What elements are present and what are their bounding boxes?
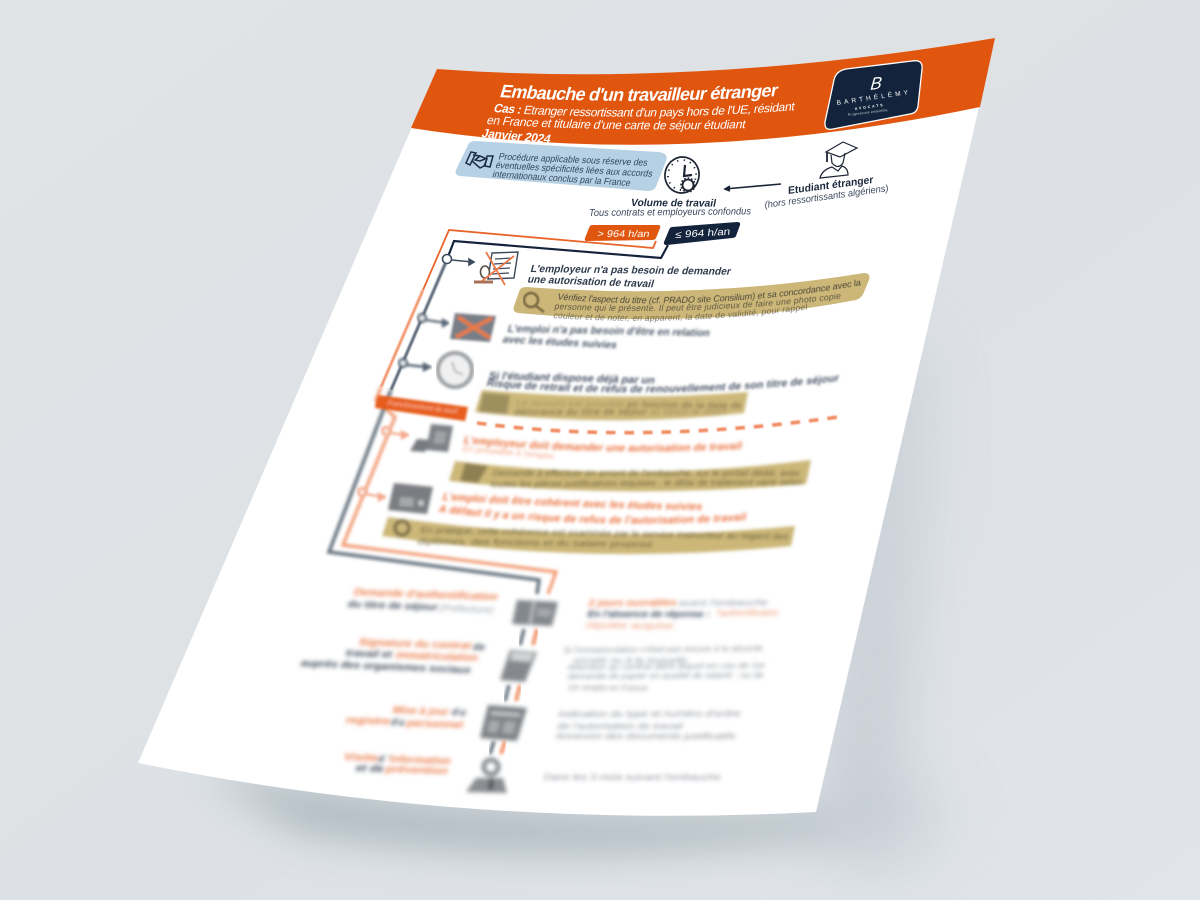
step 2 label: immatriculation: [394, 650, 479, 664]
step 4 label: d': [376, 754, 392, 765]
note text: Demande à effectuer en amont de l'embauche, sur le portail dédié, avec: [492, 468, 802, 478]
step 2 detail: 1er emploi en France: [566, 682, 649, 693]
step 3 label: Mise à jour: [391, 705, 451, 718]
notice text: Procédure applicable sous réserve des: [497, 152, 649, 169]
step 2: contract signature: [299, 637, 767, 693]
node and arrow: [358, 488, 385, 500]
note text: [417, 525, 790, 549]
step 4: medical visit: [342, 752, 722, 793]
tag: more than 964: [585, 225, 660, 241]
date: Janvier 2024: [482, 129, 551, 142]
row 4: authorisation required: [380, 422, 744, 461]
tag: less than 964: ≤ 964 h/an: [675, 227, 731, 241]
note text: [490, 468, 804, 489]
note text: couleur et de noter, en apparent, la date de validité, pour rappel: [554, 303, 808, 323]
step 3 detail: Annexion des documents justificatifs: [555, 731, 737, 741]
panel: gold note 3: [449, 460, 811, 491]
notice text: éventuelles spécificités liées aux accords: [494, 160, 654, 180]
logo: BARTHÉLÉMY: [836, 87, 909, 107]
step 2 detail: Attention au contrat dans lequel en cas de 1er: [567, 660, 767, 672]
step 4 label: prévention: [384, 764, 449, 777]
note text: diplômes, des fonctions et du salaire proposé: [417, 536, 654, 549]
step 2 label: auprès des organismes sociaux: [299, 658, 473, 676]
logo: Progressons ensemble: [848, 108, 888, 117]
panel: gold note 1: [514, 273, 870, 323]
volume label: Volume de travail: [631, 197, 717, 210]
row 5 text: A défaut il y a un risque de refus de l'autorisation de travail: [436, 503, 748, 526]
dashed threshold line: [477, 417, 838, 433]
icon: note: [460, 463, 488, 483]
step 3 detail: [555, 708, 742, 741]
step 3 label: [344, 705, 468, 731]
step 2 detail: [563, 643, 767, 693]
note text: En pratique, cette cohérence est examinée par le service instructeur au regard des: [420, 525, 790, 541]
note text: Vérifiez l'aspect du titre (cf. PRADO site Consilium) et sa concordance avec la: [558, 280, 861, 306]
step 1 detail: avant l'embauche: [678, 597, 769, 608]
icon: graduate student: [820, 142, 857, 178]
step 1: authentication: [346, 587, 780, 631]
step 2 label: travail et: [344, 648, 394, 661]
dashed connector 1: [520, 629, 537, 645]
subtitle line 2: en France et titulaire d'une carte de séjour étudiant: [487, 116, 746, 132]
step 2 detail: demande de papier en qualité de salarié - ou de: [567, 670, 765, 681]
row 4 text: L'employeur doit demander une autorisation de travail: [462, 434, 744, 454]
logo: AVOCATS: [855, 103, 883, 111]
icon: magnifier: [524, 293, 544, 312]
logo: [825, 61, 922, 129]
arrow: student to volume: [725, 184, 781, 191]
step 4 label: [342, 752, 452, 777]
node and arrow: [442, 254, 474, 265]
icon: clock grey: [438, 353, 472, 387]
step 3 label: du: [450, 707, 468, 718]
volume label: [589, 197, 751, 219]
step 1 label: Demande d'authentification: [352, 587, 499, 603]
row 5 text: L'emploi doit être cohérent avec les études suivies: [440, 491, 704, 512]
icon: diploma: [388, 483, 433, 514]
tag: more than 964: > 964 h/an: [596, 229, 650, 240]
orange banner: Franchissement du seuil: [386, 398, 459, 415]
note text: délivrance du titre de séjour et selon le motif: [514, 406, 728, 417]
note text: Le recours est possible en fonction de la date de: [516, 398, 743, 410]
step 1 detail: réputée acquise: [584, 620, 675, 631]
note text: personne qui le présente. Il peut être judicieux de faire une photo copie: [554, 292, 841, 313]
icon: residence permits: [512, 600, 558, 626]
node and arrow: [382, 427, 408, 438]
icon: register: [480, 705, 527, 741]
step 3 label: registre: [344, 715, 392, 727]
row 3 text: Risque de retrait et de refus de renouvellement de son titre de séjour: [485, 374, 840, 394]
step 1 label: du titre de séjour: [346, 599, 440, 613]
step 3: personnel register: [344, 705, 742, 741]
step 3 label: du: [389, 717, 407, 728]
volume label: Tous contrats et employeurs confondus: [589, 206, 751, 219]
note text: [514, 398, 743, 417]
step 1 detail: En l'absence de réponse :: [587, 609, 711, 619]
step 4 label: information: [388, 754, 452, 767]
step 3 detail: Indication du type et numéro d'ordre: [558, 708, 742, 719]
title: Embauche d'un travailleur étranger: [500, 84, 779, 102]
step 4 detail: Dans les 3 mois suivant l'embauche: [543, 772, 722, 782]
row 1: no authorisation: [442, 252, 732, 290]
icon: stamp crossed out: [474, 252, 518, 285]
step 1 detail: 2 jours ouvrables: [588, 597, 678, 608]
orange rail: [343, 230, 656, 594]
step 1 label: (Préfecture): [437, 603, 495, 616]
node and arrow: [418, 314, 448, 326]
navy rail: [329, 241, 668, 594]
icon: crossed document: [450, 313, 496, 342]
panel: gold note 2: [475, 390, 748, 420]
step 1 detail: [584, 597, 780, 631]
row 2 text: L'emploi n'a pas besoin d'être en relation: [506, 323, 711, 339]
row 1 heading: [526, 263, 732, 290]
row 4 text: En préalable à l'emploi: [461, 443, 555, 461]
panel: gold note 4: [382, 517, 795, 554]
tag: less than 964: [664, 222, 740, 245]
step 2 detail: Si l'immatriculation n'était pas encore à la sécurité: [563, 643, 764, 655]
notice text: internationaux conclus par la France: [491, 169, 632, 189]
note text: [554, 280, 861, 323]
step 4 label: et de: [354, 763, 386, 775]
icon: doctor: [466, 760, 507, 793]
icon: signing hand: [500, 650, 537, 682]
node and arrow: [399, 359, 430, 370]
step 3 label: personnel: [405, 718, 465, 731]
step 4 label: Visite: [342, 752, 380, 764]
step 1 label: [346, 587, 499, 616]
paper sheet: [138, 38, 995, 816]
row 5: coherent employment: [356, 481, 748, 526]
icon: handshake: [466, 152, 493, 168]
step 2 label: Signature du contrat: [357, 637, 473, 652]
panel: orange header band: [411, 38, 995, 145]
row 2 text: [501, 323, 711, 351]
panel: blue notice: [456, 141, 667, 191]
icon: note square: [479, 393, 510, 414]
logo: B: [870, 72, 883, 94]
step 1 detail: l'authentification: [716, 608, 780, 618]
orange banner: [375, 395, 468, 421]
dashed connector 3: [490, 741, 505, 754]
dashed connector 2: [505, 685, 520, 701]
row 1 heading: L'employeur n'a pas besoin de demander: [529, 263, 732, 278]
row 1 heading: une autorisation de travail: [526, 274, 655, 290]
row 2 text: avec les études suivies: [501, 334, 619, 351]
icon: note round: [395, 521, 409, 535]
icon: forms: [410, 424, 453, 452]
paper shadow: [200, 320, 950, 860]
icon: clock: [661, 153, 703, 197]
row 5 text: [436, 491, 748, 526]
step 3 detail: de l'autorisation de travail: [557, 721, 684, 731]
row 3 text: Si l'étudiant dispose déjà par un: [487, 370, 656, 387]
row 2: studies relation: [418, 313, 711, 351]
step 2 label: [299, 637, 487, 676]
student label: (hors ressortissants algériens): [764, 183, 889, 211]
row 3: risk of refusal: [397, 349, 840, 394]
note text: toutes les pièces justificatives requises ; le délai de traitement varie selon: [490, 477, 804, 489]
step 2 label: de: [471, 642, 487, 653]
step 2 detail: sociale ou à la mutuelle: [573, 655, 689, 665]
subtitle line 1: Cas : Etranger ressortissant d'un pays hors de l'UE, résidant: [494, 102, 795, 119]
notice text: [491, 152, 654, 189]
student label: Etudiant étranger: [788, 174, 873, 197]
